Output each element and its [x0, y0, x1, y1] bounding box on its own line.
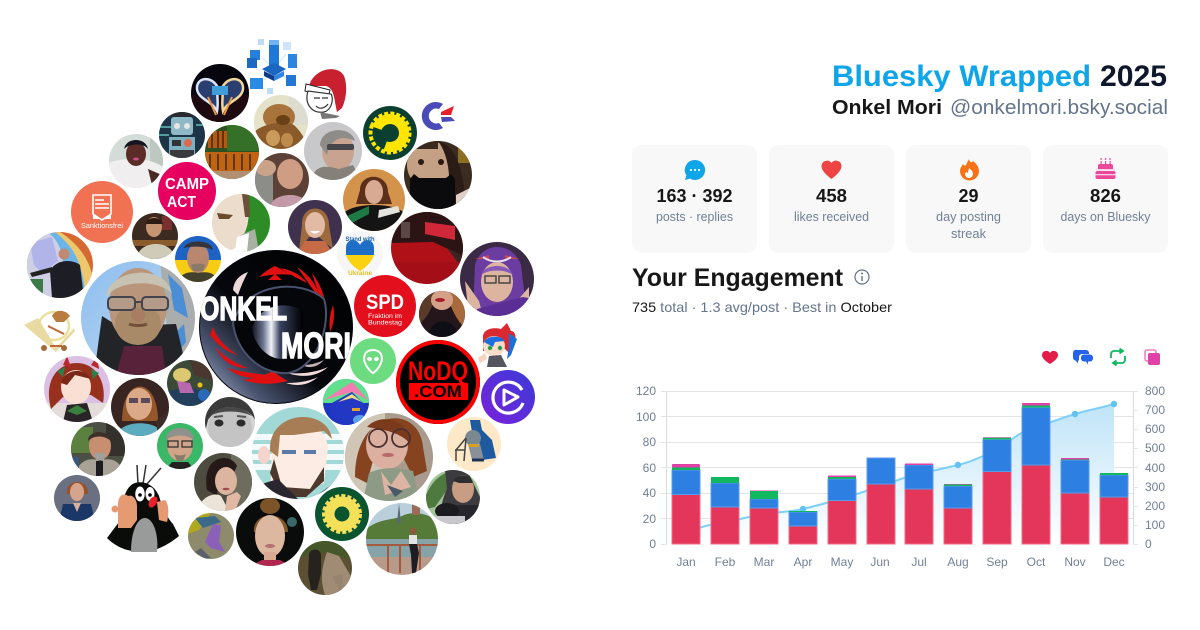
avatar: anime man — [252, 407, 344, 499]
icon: flame — [960, 159, 979, 180]
panel: day posting streak — [906, 145, 1031, 253]
heading: your engagement: Your Engagement — [632, 264, 844, 292]
stat label: posts · replies — [656, 209, 733, 224]
avatar: NoDQ logo: .COM — [414, 382, 462, 401]
title: Bluesky Wrapped — [832, 60, 1091, 93]
icon: cake — [1096, 158, 1116, 179]
left axis labels — [636, 384, 656, 551]
month labels — [676, 555, 1125, 569]
avatar: sanktionsfrei logo: Sanktionsfrei — [81, 223, 123, 230]
month labels: Apr — [794, 555, 812, 569]
left axis labels: 0 — [649, 537, 656, 551]
icon: legend heart — [1042, 351, 1058, 364]
stat label: streak — [951, 226, 986, 241]
avatar: anime girl — [44, 356, 110, 422]
left axis labels: 60 — [643, 461, 656, 475]
stat value: 163 · 392 — [656, 186, 732, 206]
avatar: camp act logo: CAMP — [165, 176, 209, 193]
user name and handle: @onkelmori.bsky.social — [950, 97, 1168, 119]
avatar: flat cap man on ukraine flag — [175, 236, 221, 282]
avatar: woman green jacket — [343, 169, 405, 231]
avatar: sunflower two — [315, 487, 369, 541]
icon: info — [855, 270, 869, 284]
left axis labels: 80 — [643, 435, 656, 449]
avatar: large selfie — [81, 261, 195, 375]
avatar: game art — [167, 360, 213, 406]
avatar: man green wall — [212, 194, 270, 252]
avatar: woman blue blazer — [54, 475, 100, 521]
avatar: woman with cat mug — [404, 141, 472, 209]
right axis labels: 500 — [1145, 441, 1165, 455]
month labels: Feb — [715, 555, 736, 569]
icon: commodore logo — [422, 102, 455, 130]
stat label — [936, 209, 1001, 241]
icon: heart — [822, 161, 842, 179]
avatar: woman black top — [419, 290, 465, 337]
icon: post horn — [24, 311, 75, 352]
right axis labels: 600 — [1145, 422, 1165, 436]
avatar: onkel mori main: ONKEL — [200, 290, 287, 327]
month labels: Jan — [676, 555, 696, 569]
avatar: street graffiti — [188, 513, 234, 559]
stat label: days on Bluesky — [1060, 209, 1151, 224]
user name and handle — [832, 97, 1168, 119]
left axis labels: 120 — [636, 384, 656, 398]
month labels: Mar — [754, 555, 774, 569]
avatar: grayscale man — [205, 397, 255, 449]
avatar: camp act logo — [158, 162, 216, 220]
avatar cluster — [24, 39, 535, 595]
avatar: man green background — [157, 423, 203, 469]
avatar: bird house — [323, 379, 369, 425]
right axis labels: 0 — [1145, 537, 1152, 551]
avatar: robot — [159, 112, 206, 158]
avatar: sanktionsfrei logo — [71, 181, 133, 243]
avatar: woman dark hair — [109, 134, 164, 188]
icon: blue blocks — [247, 39, 297, 94]
icon: chat bubble — [685, 160, 705, 180]
stat value: 826 — [1090, 186, 1121, 206]
right axis labels: 700 — [1145, 403, 1165, 417]
avatar: lake woman — [366, 503, 438, 575]
stat value: 29 — [958, 186, 978, 206]
panel: posts and replies — [632, 145, 757, 253]
month labels: Sep — [986, 555, 1008, 569]
avatar: green party sunflower — [363, 106, 417, 160]
avatar: smiling redhead — [288, 200, 342, 254]
avatar: purple hood woman — [460, 242, 534, 316]
right axis labels: 400 — [1145, 461, 1165, 475]
stacked bars — [672, 403, 1128, 544]
avatar: bald man hand — [255, 153, 309, 207]
avatar: unicorn mural man — [27, 232, 93, 298]
avatar: alf — [254, 95, 309, 149]
avatar: gray haired man — [304, 122, 362, 180]
right axis labels: 200 — [1145, 499, 1165, 513]
engagement summary: 735 total · 1.3 avg/post · Best in October — [632, 299, 892, 315]
avatar: santa meme — [305, 69, 350, 119]
month labels: Nov — [1064, 555, 1086, 569]
right axis labels: 300 — [1145, 480, 1165, 494]
avatar: brunette thinking — [194, 453, 253, 511]
right axis labels: 100 — [1145, 518, 1165, 532]
avatar: stand with ukraine: Ukraine — [348, 270, 372, 277]
avatar: anime red and blue hair — [478, 323, 517, 367]
title: 2025 — [1100, 60, 1167, 93]
chart legend icons — [1042, 348, 1160, 366]
month labels: Jul — [911, 555, 927, 569]
avatar: SPD logo — [354, 275, 416, 337]
user name and handle: Onkel Mori — [832, 97, 942, 119]
avatar: person with beard and glasses — [132, 213, 178, 259]
avatar: bearded man jacket — [71, 422, 126, 476]
stat value: 458 — [816, 186, 847, 206]
avatar: SPD logo: SPD — [366, 291, 404, 314]
icon: legend replies — [1073, 350, 1093, 364]
right axis labels: 800 — [1145, 384, 1165, 398]
avatar: red room — [391, 212, 463, 284]
right axis labels — [1145, 384, 1165, 551]
avatar: camp act logo: ACT — [167, 194, 196, 211]
avatar: alien logo — [350, 338, 396, 384]
avatar: NoDQ logo — [396, 340, 480, 424]
left axis labels: 40 — [643, 486, 656, 500]
panel: likes received — [769, 145, 894, 253]
avatar: woman hair bun — [236, 498, 304, 566]
avatar: stand with ukraine: Stand with — [346, 237, 375, 243]
cumulative area — [740, 406, 1114, 526]
left axis labels: 100 — [636, 410, 656, 424]
avatar: indie retro news — [205, 125, 259, 180]
avatar: redhead glasses — [345, 413, 433, 501]
avatar: onkel mori main — [199, 250, 353, 404]
left axis labels: 20 — [643, 512, 656, 526]
avatar: elgato logo — [481, 370, 535, 424]
month labels: Jun — [870, 555, 890, 569]
stat label: day posting — [936, 209, 1001, 224]
month labels: Dec — [1103, 555, 1125, 569]
avatar: SPD logo: Bundestag — [368, 320, 402, 326]
avatar: woman brown hair glasses — [111, 378, 169, 436]
avatar: onkel mori main: MORI — [281, 325, 351, 366]
avatar: forest trail — [298, 541, 352, 595]
avatar: batman walker — [447, 417, 501, 471]
avatar: neon heart — [191, 64, 249, 122]
month labels: May — [831, 555, 853, 569]
month labels: Aug — [947, 555, 969, 569]
month labels: Oct — [1027, 555, 1046, 569]
stat label: likes received — [794, 209, 869, 224]
avatar: NoDQ logo: NoDQ — [408, 356, 468, 386]
avatar: car selfie — [426, 470, 480, 524]
cumulative line — [686, 404, 1114, 532]
chart: monthly engagement stacked bars with cumulative line — [636, 384, 1165, 569]
icon: legend quotes — [1145, 350, 1160, 365]
avatar: stand with ukraine — [337, 231, 383, 277]
panel: days on bluesky — [1043, 145, 1168, 253]
avatar: little mole — [107, 465, 179, 552]
avatar: SPD logo: Fraktion im — [368, 314, 402, 320]
icon: legend repost — [1111, 348, 1125, 366]
